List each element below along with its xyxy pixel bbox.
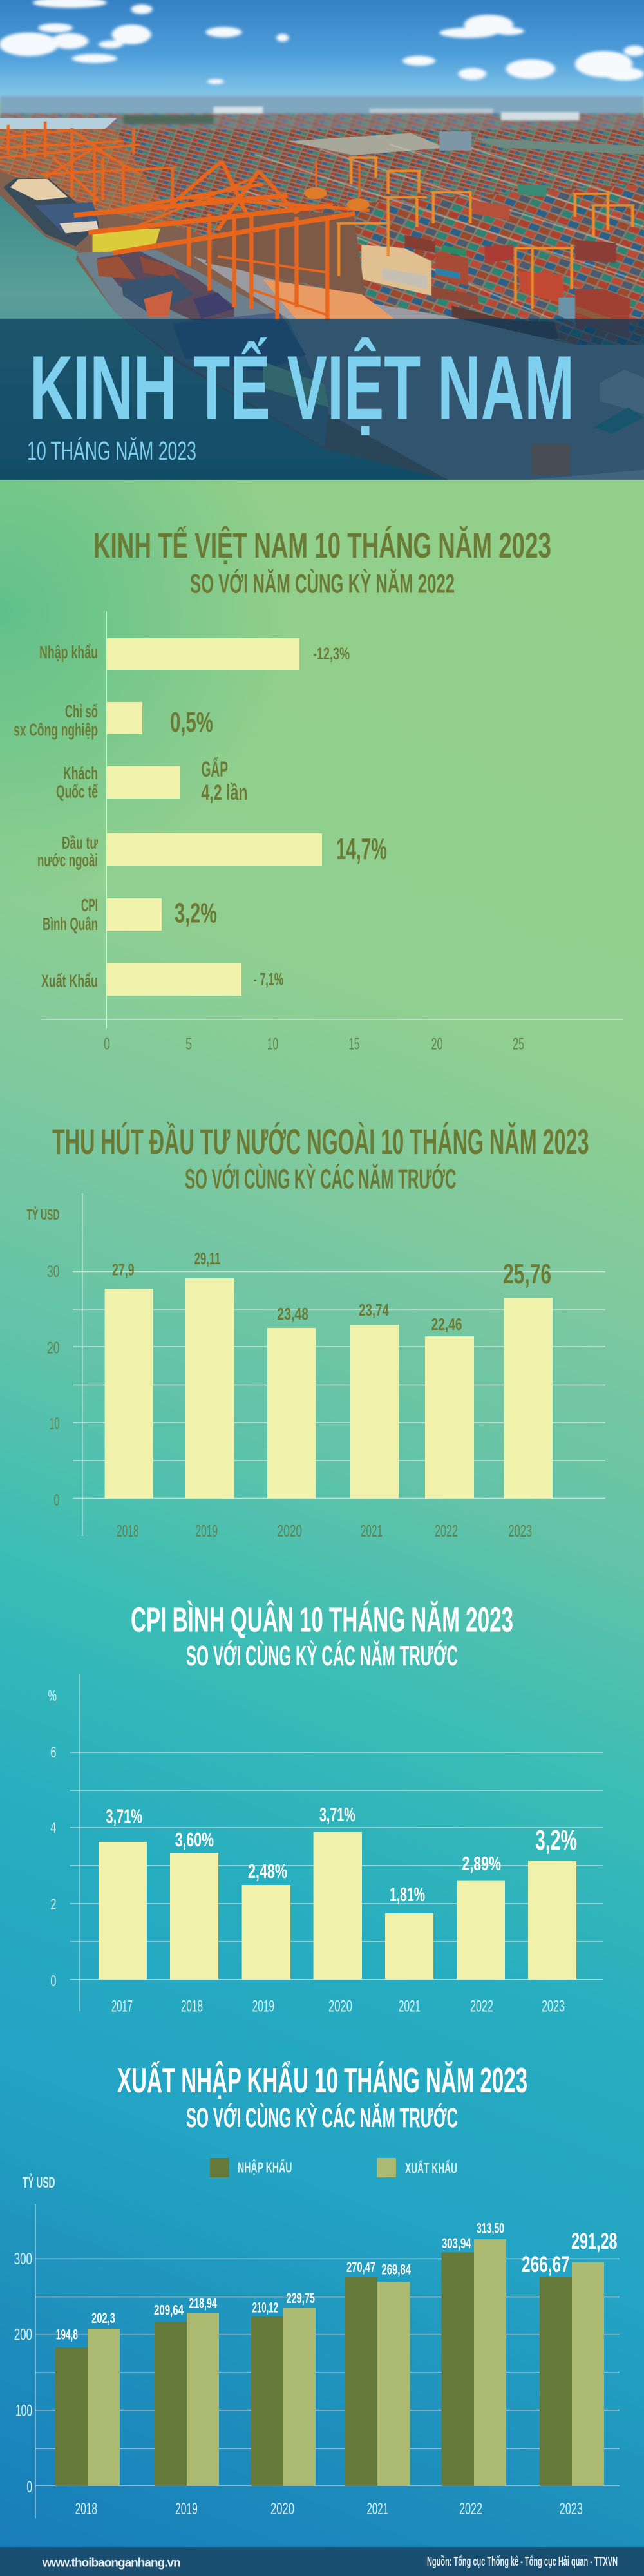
x axis ticks: 15: [349, 1036, 359, 1054]
value labels: [106, 1803, 577, 1906]
y axis ticks: 20: [47, 1340, 59, 1358]
photo container yard: [115, 130, 644, 348]
category labels: nước ngoài: [37, 850, 98, 870]
y axis ticks: 200: [14, 2326, 32, 2344]
legend: XUẤT KHẨU: [405, 2159, 457, 2177]
photo sky: [0, 0, 644, 102]
y axis ticks and unit: 2: [50, 1896, 56, 1913]
x axis ticks: 0: [104, 1036, 110, 1054]
y axis ticks: 10: [49, 1415, 59, 1433]
value labels: 22,46: [431, 1314, 462, 1334]
photo river behind the port: [0, 118, 117, 131]
year labels: 2023: [560, 2500, 583, 2518]
value labels: 14,7%: [336, 832, 387, 866]
year labels: 2018: [75, 2500, 97, 2518]
category labels: sx Công nghiệp: [14, 720, 98, 740]
photo lit quay glow: [263, 279, 394, 319]
value labels: 209,64: [154, 2302, 184, 2318]
year labels: 2021: [361, 1521, 383, 1540]
value labels: 3,2%: [535, 1824, 577, 1856]
y axis ticks and unit: 6: [50, 1744, 56, 1761]
value labels: 2,48%: [248, 1860, 287, 1882]
value labels: [112, 1249, 551, 1334]
photo clouds: [0, 0, 644, 84]
bar: Khách Quốc tế: [107, 766, 180, 799]
photo horizon city: [0, 96, 644, 133]
y axis ticks and unit: [48, 1687, 57, 1990]
photo big orange gantry cranes: [0, 122, 634, 320]
value labels: 29,11: [194, 1249, 221, 1268]
category labels: Quốc tế: [56, 782, 98, 802]
value labels: 3,2%: [175, 898, 217, 929]
photo ship one: [3, 178, 160, 254]
year labels: 2023: [542, 1998, 565, 2016]
bars: exports: [88, 2239, 604, 2486]
year labels: 2019: [252, 1998, 274, 2016]
photo left terminal ground: [0, 129, 193, 230]
year labels: 2020: [270, 2500, 294, 2518]
y axis ticks: [14, 2250, 32, 2496]
year labels: 2020: [277, 1521, 302, 1540]
year labels: 2022: [459, 2500, 482, 2518]
category labels: CPI: [81, 895, 98, 915]
photo water: [0, 196, 448, 480]
year labels: 2021: [367, 2500, 388, 2518]
y axis ticks: 0: [27, 2478, 32, 2496]
panel: import export grouped bar chart: [14, 2060, 620, 2519]
x axis ticks: 20: [431, 1036, 443, 1054]
panel: CPI bar chart: [48, 1600, 603, 2016]
subheading: economy: SO VỚI NĂM CÙNG KỲ NĂM 2022: [190, 568, 455, 599]
year labels: 2020: [328, 1998, 352, 2016]
value labels: 23,48: [277, 1304, 308, 1323]
year labels: 2017: [111, 1998, 133, 2016]
year labels: 2023: [509, 1521, 532, 1540]
photo base ground: [0, 118, 644, 480]
footer website: www.thoibaonganhang.vn: [42, 2556, 181, 2570]
footer band: [0, 2547, 644, 2576]
photo main ship with containers: [76, 250, 328, 447]
value labels: 210,12: [252, 2300, 278, 2316]
bar: Xuất Khẩu: [107, 963, 242, 996]
value labels: [170, 644, 387, 989]
value labels: 266,67: [522, 2252, 570, 2277]
unit label: TỶ USD: [27, 1205, 59, 1223]
value labels: 3,71%: [106, 1805, 142, 1828]
year labels: 2018: [117, 1521, 139, 1540]
x axis ticks: [104, 1036, 524, 1054]
bars: imports: [55, 2253, 572, 2486]
value labels: 0,5%: [170, 706, 213, 738]
y axis ticks: 300: [14, 2250, 32, 2268]
category labels: Xuất Khẩu: [41, 971, 98, 990]
year labels: 2021: [399, 1998, 421, 2016]
legend: NHẬP KHẨU: [238, 2159, 292, 2175]
category labels: [14, 642, 98, 990]
value labels: 4,2 lần: [201, 781, 247, 805]
photo right building and ship funnel: [530, 370, 644, 480]
value labels: 202,3: [91, 2310, 115, 2326]
value labels: 218,94: [189, 2295, 217, 2311]
value labels: 194,8: [56, 2326, 78, 2342]
legend: [210, 2158, 457, 2177]
value labels: [56, 2221, 617, 2342]
value labels: 270,47: [346, 2259, 375, 2275]
value labels: 25,76: [503, 1258, 551, 1290]
value labels: -12,3%: [313, 644, 350, 663]
y axis ticks and unit: %: [48, 1687, 57, 1705]
unit label: TỶ USD: [23, 2173, 55, 2192]
value labels: 2,89%: [462, 1852, 501, 1875]
year labels: 2022: [435, 1521, 458, 1540]
year labels: [75, 2500, 583, 2518]
year labels: 2018: [181, 1998, 203, 2016]
category labels: Bình Quân: [43, 914, 98, 934]
value labels: 229,75: [286, 2290, 315, 2306]
bar: Nhập khẩu: [107, 638, 299, 670]
y axis ticks: 0: [54, 1492, 59, 1510]
value labels: 269,84: [381, 2262, 412, 2277]
value labels: 27,9: [112, 1260, 134, 1280]
x axis ticks: 25: [513, 1036, 524, 1054]
x axis ticks: 5: [185, 1036, 192, 1054]
year labels: [111, 1998, 565, 2016]
bars: 2017 to 2023: [99, 1832, 576, 1980]
year labels: [117, 1521, 532, 1540]
category labels: Khách: [63, 763, 98, 783]
value labels: 23,74: [359, 1300, 389, 1320]
bar: CPI Bình Quân: [107, 898, 162, 931]
panel: Vietnam economy horizontal bars: [14, 525, 623, 1054]
value labels: 1,81%: [390, 1883, 425, 1906]
category labels: Đầu tư: [62, 833, 98, 853]
photo area under big cranes: [205, 211, 366, 296]
year labels: 2022: [470, 1998, 493, 2016]
value labels: 3,60%: [175, 1828, 214, 1851]
value labels: - 7,1%: [254, 970, 283, 989]
value labels: GẤP: [201, 757, 228, 782]
panel: foreign investment bar chart: [27, 1121, 605, 1540]
x axis ticks: 10: [267, 1036, 278, 1054]
y axis ticks and unit: 0: [50, 1973, 56, 1990]
bar: Đầu tư nước ngoài: [107, 833, 322, 866]
y axis ticks: [47, 1263, 59, 1510]
bars: 2018 to 2023: [105, 1278, 553, 1498]
category labels: Nhập khẩu: [39, 642, 98, 662]
y axis ticks and unit: 4: [50, 1819, 56, 1837]
hero photo: container port: [0, 0, 644, 480]
bar: Chỉ số sx Công nghiệp: [107, 702, 142, 734]
value labels: 291,28: [571, 2229, 617, 2254]
year labels: 2019: [196, 1521, 218, 1540]
hero subtitle: 10 THÁNG NĂM 2023: [27, 436, 196, 466]
y axis ticks: 30: [47, 1263, 59, 1281]
value labels: 303,94: [442, 2235, 471, 2251]
year labels: 2019: [175, 2500, 198, 2518]
y axis ticks: 100: [15, 2402, 32, 2420]
category labels: Chỉ số: [65, 701, 98, 721]
value labels: 313,50: [477, 2221, 504, 2237]
photo quay concrete: [193, 256, 644, 480]
value labels: 3,71%: [319, 1803, 355, 1826]
title band overlay: [0, 319, 644, 480]
